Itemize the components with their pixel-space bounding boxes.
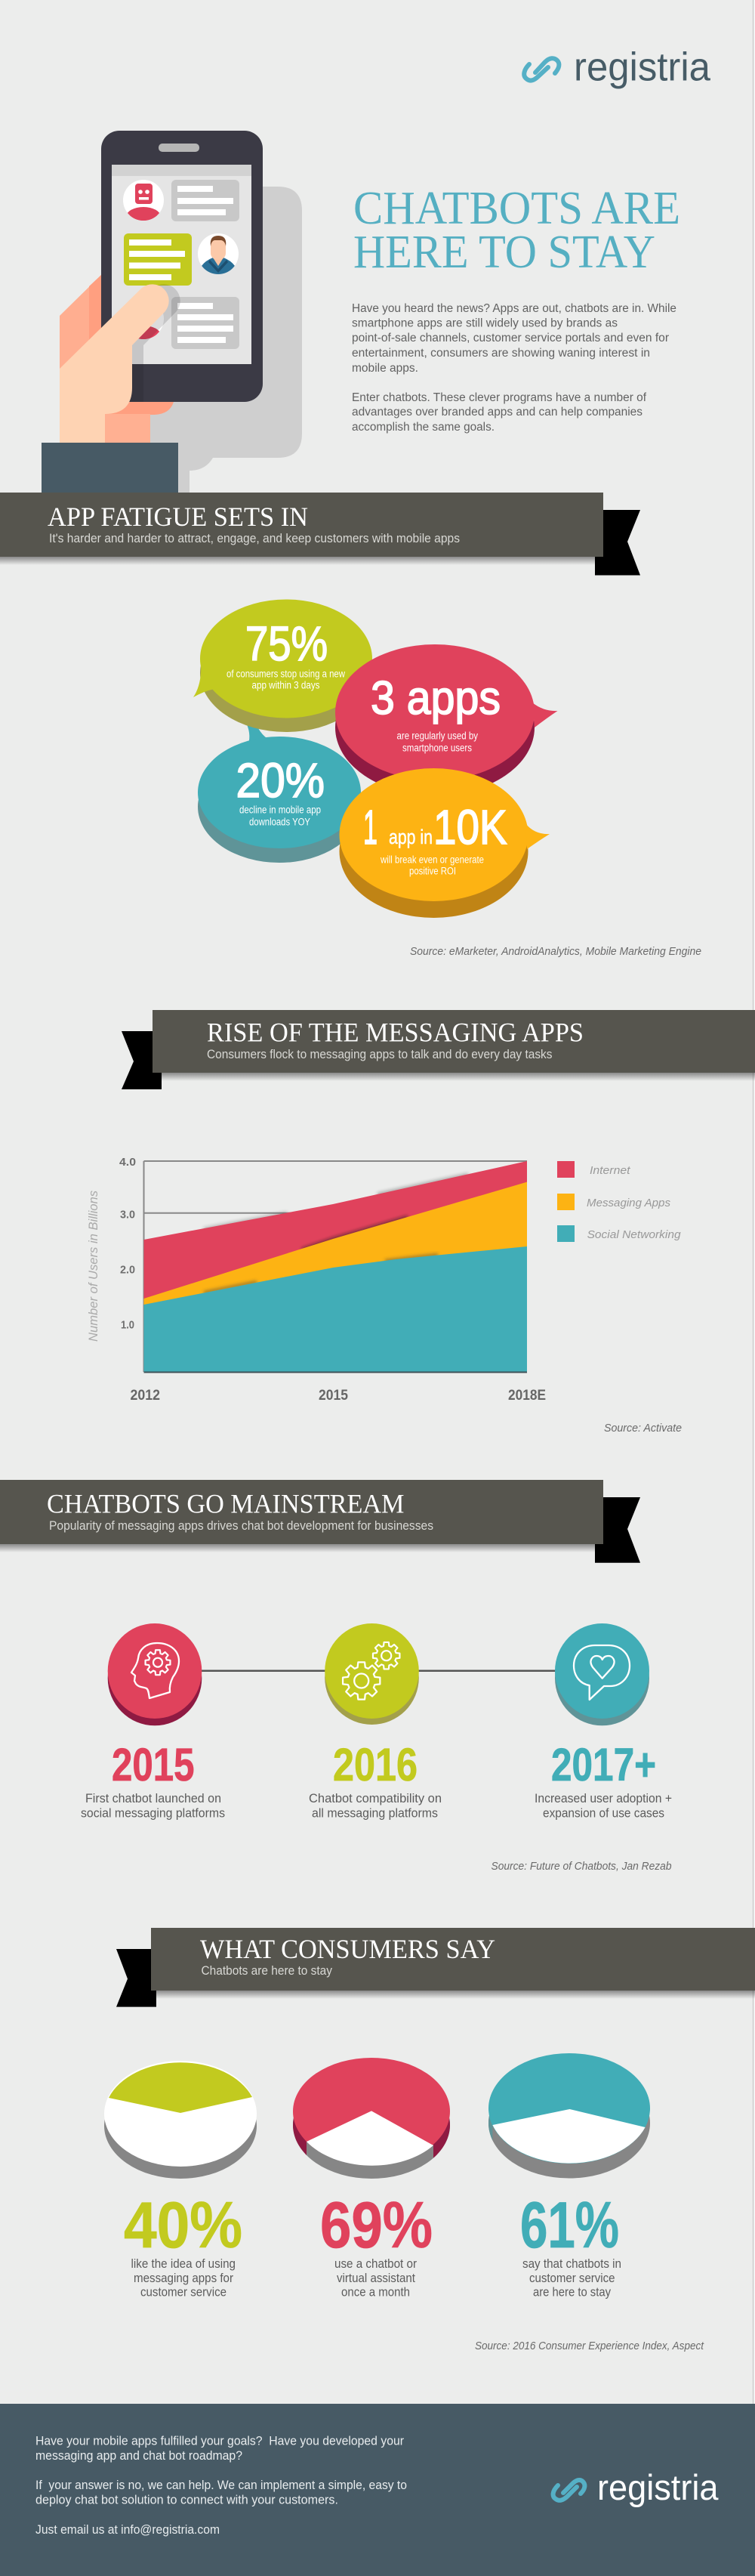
chat: person avatar xyxy=(198,233,239,276)
intro text: mobile apps. xyxy=(352,362,418,375)
footer text: Have your mobile apps fulfilled your goals? Have you developed your xyxy=(35,2434,404,2448)
banner: consumers: Chatbots are here to stay xyxy=(201,1964,333,1978)
intro text: smartphone apps are still widely used by brands as xyxy=(352,317,618,329)
banner: mainstream: Popularity of messaging apps drives chat bot development for businesses xyxy=(49,1519,433,1533)
thumb shadow xyxy=(132,284,180,364)
banner: messaging apps: RISE OF THE MESSAGING APPS xyxy=(207,1017,584,1047)
timeline connector xyxy=(155,1669,602,1672)
y axis ticks: 4.0 xyxy=(119,1156,136,1169)
legend: Internet xyxy=(590,1164,630,1177)
timeline: 2016: Chatbot compatibility on xyxy=(309,1792,442,1805)
intro text: Have you heard the news? Apps are out, chatbots are in. While xyxy=(352,302,676,315)
timeline: 2015 xyxy=(81,1623,225,1821)
title: CHATBOTS ARE xyxy=(353,183,680,234)
timeline: 2017+: 2017+ xyxy=(551,1739,656,1790)
title xyxy=(353,183,680,278)
series: messaging apps xyxy=(143,1182,527,1372)
bubble: 20% teal: decline in mobile app xyxy=(239,804,321,816)
logo: registria footer: registria xyxy=(597,2467,719,2507)
banner: consumers xyxy=(116,1928,755,2007)
banner: app fatigue: APP FATIGUE SETS IN xyxy=(48,502,308,532)
bubble: 20% teal: downloads YOY xyxy=(249,816,310,828)
banner: mainstream xyxy=(0,1480,640,1563)
icon: gears xyxy=(343,1642,399,1700)
timeline: 2016: 2016 xyxy=(333,1739,418,1790)
pie: 40%: messaging apps for xyxy=(134,2272,233,2285)
x axis labels: 2012 xyxy=(130,1387,160,1404)
series: social networking xyxy=(143,1246,527,1372)
legend xyxy=(557,1161,681,1242)
bubble: 75% green: of consumers stop using a new xyxy=(226,668,345,680)
timeline: 2017+ xyxy=(535,1623,672,1821)
pie: 61%: say that chatbots in xyxy=(522,2257,621,2271)
bubble: 3 apps red: 3 apps xyxy=(371,672,501,724)
pie: 69%: virtual assistant xyxy=(337,2272,415,2285)
speech bubble shadow xyxy=(150,187,302,493)
legend: Messaging Apps xyxy=(587,1197,670,1209)
phone xyxy=(101,131,263,402)
illustration: hand holding phone xyxy=(42,131,302,493)
pie: 69%: use a chatbot or xyxy=(334,2257,417,2271)
intro text: accomplish the same goals. xyxy=(352,421,495,434)
bubble: 3 apps red: smartphone users xyxy=(402,742,472,754)
hand back xyxy=(60,275,174,443)
title: HERE TO STAY xyxy=(353,227,655,278)
banner: app fatigue: It's harder and harder to attract, engage, and keep customers with mobile apps xyxy=(49,532,460,545)
x axis labels: 2018E xyxy=(508,1387,546,1404)
intro text: point-of-sale channels, customer service portals and even for xyxy=(352,332,669,344)
timeline: 2015: First chatbot launched on xyxy=(85,1792,221,1805)
bubble: 20% teal xyxy=(198,721,361,863)
banner: app fatigue xyxy=(0,493,640,576)
footer text: Just email us at info@registria.com xyxy=(35,2523,220,2537)
footer text: deploy chat bot solution to connect with your customers. xyxy=(35,2493,338,2507)
pie: 61% xyxy=(488,2053,650,2300)
footer text: If your answer is no, we can help. We can implement a simple, easy to xyxy=(35,2479,407,2492)
intro text: entertainment, consumers are showing waning interest in xyxy=(352,347,650,360)
timeline: 2015: 2015 xyxy=(112,1739,195,1790)
pie: 69%: once a month xyxy=(341,2286,410,2300)
banner: messaging apps: Consumers flock to messaging apps to talk and do every day tasks xyxy=(207,1048,553,1061)
chat: gray bubble 1 xyxy=(171,180,239,221)
timeline: 2017+: Increased user adoption + xyxy=(535,1792,672,1805)
banner: messaging apps xyxy=(122,1010,755,1089)
source: fatigue: Source: eMarketer, AndroidAnalytics, Mobile Marketing Engine xyxy=(410,945,701,958)
chat: covered avatar xyxy=(139,314,164,339)
timeline: 2016 xyxy=(309,1623,442,1821)
y axis ticks xyxy=(119,1156,136,1331)
intro text xyxy=(352,302,676,434)
source: timeline: Source: Future of Chatbots, Jan Rezab xyxy=(491,1860,672,1873)
footer text: messaging app and chat bot roadmap? xyxy=(35,2449,242,2463)
pie: 40%: like the idea of using xyxy=(131,2257,236,2271)
chat: gray bubble 2 xyxy=(171,297,239,349)
y axis ticks: 3.0 xyxy=(120,1209,135,1221)
chart grid xyxy=(143,1161,527,1372)
intro text: advantages over branded apps and can help companies xyxy=(352,406,643,419)
bubble: 1 app in 10K orange: app in xyxy=(389,826,433,848)
bubble: 1 app in 10K orange: 10K xyxy=(433,800,507,854)
icon: head with gear xyxy=(131,1643,179,1698)
bubble: 75% green: 75% xyxy=(245,616,328,671)
logo: registria header: registria xyxy=(574,45,710,89)
source: consumers: Source: 2016 Consumer Experience Index, Aspect xyxy=(475,2340,704,2352)
pie: 61%: 61% xyxy=(520,2189,619,2262)
pie: 69% xyxy=(293,2058,450,2300)
bubble: 1 app in 10K orange: 1 xyxy=(363,800,378,854)
y axis ticks: 1.0 xyxy=(121,1319,134,1331)
pie: 40%: 40% xyxy=(124,2189,242,2262)
bubble: 75% green: app within 3 days xyxy=(252,680,320,690)
bubble: 3 apps red: are regularly used by xyxy=(397,730,478,742)
banner: mainstream: CHATBOTS GO MAINSTREAM xyxy=(47,1488,405,1518)
timeline: 2015: social messaging platforms xyxy=(81,1807,225,1821)
icon: heart speech bubble xyxy=(574,1645,630,1700)
bubble: 3 apps red xyxy=(335,644,557,795)
series: internet xyxy=(143,1161,527,1372)
bubble: 1 app in 10K orange: positive ROI xyxy=(409,866,456,876)
x axis labels xyxy=(130,1387,546,1404)
pie: 40% xyxy=(104,2061,257,2300)
area chart xyxy=(87,1156,681,1404)
source: chart: Source: Activate xyxy=(604,1422,682,1435)
icon: chain link xyxy=(524,58,559,81)
chat: green bubble xyxy=(124,233,192,286)
banner: consumers: WHAT CONSUMERS SAY xyxy=(200,1934,495,1964)
intro text: Enter chatbots. These clever programs have a number of xyxy=(352,391,647,404)
bubble: 75% green xyxy=(193,600,372,732)
pie: 69%: 69% xyxy=(320,2189,433,2262)
y axis label: Number of Users in Billions xyxy=(87,1191,100,1342)
sleeve xyxy=(42,443,178,493)
bubble: 1 app in 10K orange: will break even or generate xyxy=(380,854,484,866)
x axis labels: 2015 xyxy=(319,1387,348,1404)
y axis ticks: 2.0 xyxy=(120,1263,135,1277)
timeline: 2017+: expansion of use cases xyxy=(543,1807,664,1821)
pie: 61%: are here to stay xyxy=(533,2286,612,2300)
pie: 61%: customer service xyxy=(529,2272,615,2285)
pie: 40%: customer service xyxy=(140,2286,226,2300)
footer panel xyxy=(0,2404,755,2576)
legend: Social Networking xyxy=(587,1228,681,1241)
chat: bot avatar xyxy=(123,180,164,221)
bubble: 1 app in 10K orange xyxy=(340,768,550,918)
footer text xyxy=(35,2434,407,2537)
timeline: 2016: all messaging platforms xyxy=(312,1807,438,1821)
bubble: 20% teal: 20% xyxy=(236,753,325,808)
thumb xyxy=(60,284,169,443)
